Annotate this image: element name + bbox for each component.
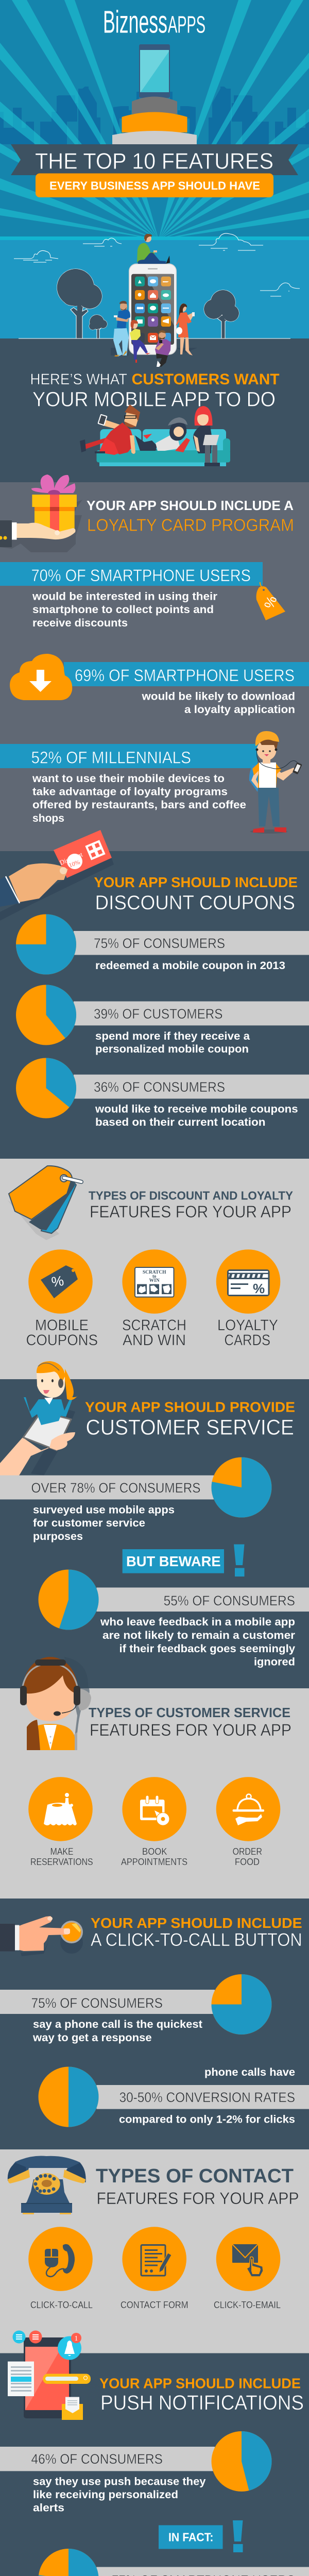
title ribbon: THE TOP 10 FEATURES [35, 148, 273, 174]
logo: APPS [168, 11, 205, 38]
feature: make reservations: MAKE [50, 1846, 74, 1857]
heading: YOUR APP SHOULD PROVIDE [85, 1399, 295, 1415]
illustration: headset agent [20, 1657, 80, 1750]
feature: loyalty cards: LOYALTY [217, 1317, 278, 1334]
heading [94, 874, 298, 914]
stat: conversion rates pie: phone calls have [204, 2066, 295, 2078]
panel: discount coupons [0, 830, 309, 1159]
heading: TYPES OF CUSTOMER SERVICE [89, 1705, 290, 1720]
stat: over 78 percent pie [0, 1457, 272, 1543]
stat: 36 percent pie [16, 1058, 309, 1128]
stat: 52 percent: want to use their mobile devices to [32, 772, 225, 785]
person: woman sitting [130, 320, 150, 363]
feature: scratch and win: AND WIN [123, 1332, 186, 1349]
feature: make reservations [28, 1777, 93, 1867]
stat: 55 percent pie: 55% OF CONSUMERS [164, 1593, 295, 1608]
stat: over 78 percent pie: OVER 78% OF CONSUMERS [31, 1480, 201, 1496]
stat: 46 percent pie: alerts [33, 2502, 64, 2514]
stat: 55 percent pie [38, 1569, 309, 1668]
subtitle pill [36, 173, 273, 197]
stat: 75 percent pie [0, 1974, 272, 2044]
feature: loyalty cards: % [253, 1281, 265, 1296]
feature: book appointments: BOOK [142, 1846, 167, 1857]
heading: YOUR APP SHOULD INCLUDE [91, 1915, 302, 1931]
stat: 75 percent pie: way to get a response [32, 2031, 152, 2044]
stat: 46 percent pie: like receiving personalized [33, 2488, 178, 2501]
light rays [0, 0, 309, 240]
stat: 77 percent pie [38, 2549, 309, 2576]
illustration: phone with notifications [8, 2331, 91, 2420]
panel: push notifications [0, 2331, 309, 2576]
stat: 75 percent pie: redeemed a mobile coupon in 2013 [95, 959, 285, 972]
icon: percent tag [256, 582, 285, 620]
feature: loyalty cards [216, 1249, 280, 1349]
callout: but beware [123, 1545, 244, 1577]
heading: YOUR APP SHOULD INCLUDE [99, 2376, 301, 2392]
icon: tags [8, 1166, 81, 1240]
stat: 75 percent pie [16, 914, 309, 975]
icon: podium with phone [112, 44, 197, 144]
stat: conversion rates pie: compared to only 1-2% for clicks [119, 2113, 295, 2126]
stat: 55 percent pie: are not likely to remain a customer [102, 1629, 296, 1641]
panel: loyalty card program [0, 474, 309, 851]
person on top of phone [137, 234, 170, 264]
person: woman right [176, 303, 195, 355]
stat: 70 percent: 70% OF SMARTPHONE USERS [31, 566, 251, 585]
feature: scratch and win: to [152, 1274, 157, 1279]
heading: YOUR APP SHOULD INCLUDE [94, 874, 298, 890]
panel: types of discount and loyalty [0, 1159, 309, 1379]
panel: intro customers want [0, 234, 309, 482]
city skyline [0, 87, 309, 144]
icon: download cloud [10, 654, 72, 700]
stat: 39 percent pie: 39% OF CUSTOMERS [94, 1006, 222, 1022]
stat: 69 percent: would be likely to download [141, 690, 295, 703]
illustration: finger pressing button [0, 1916, 83, 1956]
heading: FEATURES FOR YOUR APP [90, 1202, 291, 1221]
stat: conversion rates pie [38, 2066, 309, 2127]
feature: click-to-email: CLICK-TO-EMAIL [214, 2299, 281, 2310]
heading: YOUR MOBILE APP TO DO [32, 388, 276, 411]
stat: 70 percent: receive discounts [32, 617, 128, 629]
feature: scratch and win [122, 1249, 186, 1349]
heading [96, 2165, 299, 2208]
stat: 55 percent pie: ignored [254, 1656, 295, 1668]
icon: rotary telephone [8, 2156, 86, 2214]
heading [85, 1399, 295, 1439]
stat: over 78 percent pie: surveyed use mobile apps [33, 1503, 175, 1516]
feature: book appointments [121, 1777, 187, 1867]
feature: click-to-call: CLICK-TO-CALL [30, 2299, 93, 2310]
heading [89, 1705, 291, 1739]
feature: order food: FOOD [235, 1856, 260, 1867]
stat: over 78 percent pie: for customer service [33, 1517, 145, 1529]
stat: 69 percent: a loyalty application [184, 703, 295, 716]
people on couch illustration [80, 404, 230, 466]
stat: 55 percent pie: who leave feedback in a mobile app [100, 1616, 295, 1628]
trees [57, 269, 239, 338]
feature: order food [216, 1777, 280, 1867]
stat: 75 percent pie: 75% OF CONSUMERS [31, 1995, 163, 2011]
feature: book appointments: APPOINTMENTS [121, 1856, 187, 1867]
icon: discount card in hand [0, 830, 112, 907]
person: man sitting [155, 330, 171, 367]
stat: 46 percent pie [0, 2431, 272, 2514]
callout: in fact [159, 2520, 243, 2552]
feature: scratch and win: SCRATCH [122, 1317, 186, 1334]
heading: FEATURES FOR YOUR APP [90, 1721, 291, 1739]
heading: YOUR APP SHOULD INCLUDE A [87, 498, 294, 513]
app phone illustration [129, 264, 176, 354]
heading [89, 1189, 293, 1221]
logo: Bizness [103, 5, 167, 40]
panel: types of customer service [0, 1657, 309, 1899]
feature: order food: ORDER [233, 1846, 262, 1857]
stat: 55 percent pie: if their feedback goes seemingly [119, 1642, 295, 1655]
heading: HERE’S WHAT [30, 371, 127, 388]
feature: loyalty cards: CARDS [225, 1332, 270, 1349]
panel: click-to-call button [0, 1899, 309, 2149]
feature: scratch and win: WIN [149, 1278, 160, 1283]
icon: discount card in hand: Discount [58, 850, 84, 867]
stat: 70 percent: smartphone to collect points and [32, 603, 214, 616]
stat: 52 percent: take advantage of loyalty programs [32, 786, 228, 798]
clouds [14, 233, 300, 296]
stat: 70 percent [0, 562, 263, 629]
stat: 36 percent pie: 36% OF CONSUMERS [94, 1079, 225, 1095]
heading: DISCOUNT COUPONS [95, 892, 295, 914]
stat: over 78 percent pie: purposes [33, 1530, 83, 1543]
feature: mobile coupons [26, 1249, 98, 1349]
stat: 39 percent pie: spend more if they receive a [95, 1030, 250, 1042]
stat: 36 percent pie: based on their current location [95, 1116, 266, 1128]
stat: 39 percent pie [16, 985, 309, 1055]
stat: 36 percent pie: would like to receive mobile coupons [95, 1103, 298, 1115]
heading: LOYALTY CARD PROGRAM [87, 516, 294, 535]
stat: 69 percent [64, 662, 309, 716]
panel: hero [0, 0, 309, 339]
illustration: boy with phone [249, 731, 302, 834]
stat: 52 percent: offered by restaurants, bars and coffee [32, 799, 246, 811]
feature: make reservations: RESERVATIONS [30, 1856, 93, 1867]
feature: mobile coupons: COUPONS [26, 1332, 98, 1349]
heading [99, 2376, 304, 2414]
heading: CUSTOMER SERVICE [85, 1415, 294, 1439]
heading [30, 371, 280, 411]
stat: 46 percent pie: say they use push because they [33, 2476, 206, 2488]
heading: TYPES OF CONTACT [96, 2165, 294, 2187]
stat: 70 percent: would be interested in using their [32, 590, 218, 603]
stat: 75 percent pie: 75% OF CONSUMERS [94, 936, 225, 951]
stat: 52 percent [0, 744, 258, 824]
heading: CUSTOMERS WANT [132, 371, 280, 388]
stat: 52 percent: 52% OF MILLENNIALS [31, 748, 191, 767]
heading: TYPES OF DISCOUNT AND LOYALTY [89, 1189, 293, 1202]
stat: conversion rates pie: 30-50% CONVERSION RATES [119, 2090, 295, 2105]
icon: percent tag: % [261, 594, 280, 611]
stat: 39 percent pie: personalized mobile coupon [95, 1043, 249, 1055]
stat: 75 percent pie: say a phone call is the quickest [33, 2018, 202, 2030]
heading: FEATURES FOR YOUR APP [97, 2189, 299, 2208]
icon: gift in hand [0, 474, 77, 547]
illustration: phone with notifications: 1 [74, 2335, 78, 2343]
feature: mobile coupons: % [50, 1273, 65, 1290]
feature: click-to-call [28, 2227, 93, 2310]
callout: in fact: IN FACT: [168, 2531, 213, 2544]
icon: discount card in hand: 10% [68, 858, 81, 869]
heading [91, 1915, 302, 1950]
feature: click-to-email [214, 2227, 281, 2310]
stat: 46 percent pie: 46% OF CONSUMERS [31, 2451, 163, 2467]
feature: mobile coupons: MOBILE [35, 1317, 89, 1334]
feature: contact form [121, 2227, 188, 2310]
panel: customer service [0, 1361, 309, 1688]
person: man left [113, 301, 130, 357]
heading [87, 498, 294, 535]
feature: contact form: CONTACT FORM [121, 2299, 188, 2310]
illustration: support agent on phone [0, 1361, 78, 1476]
subtitle pill: EVERY BUSINESS APP SHOULD HAVE [49, 179, 260, 192]
panel: types of contact [0, 2149, 309, 2353]
callout: but beware: BUT BEWARE [126, 1553, 221, 1569]
stat: 52 percent: shops [32, 812, 64, 824]
feature: scratch and win: SCRATCH [143, 1270, 166, 1275]
